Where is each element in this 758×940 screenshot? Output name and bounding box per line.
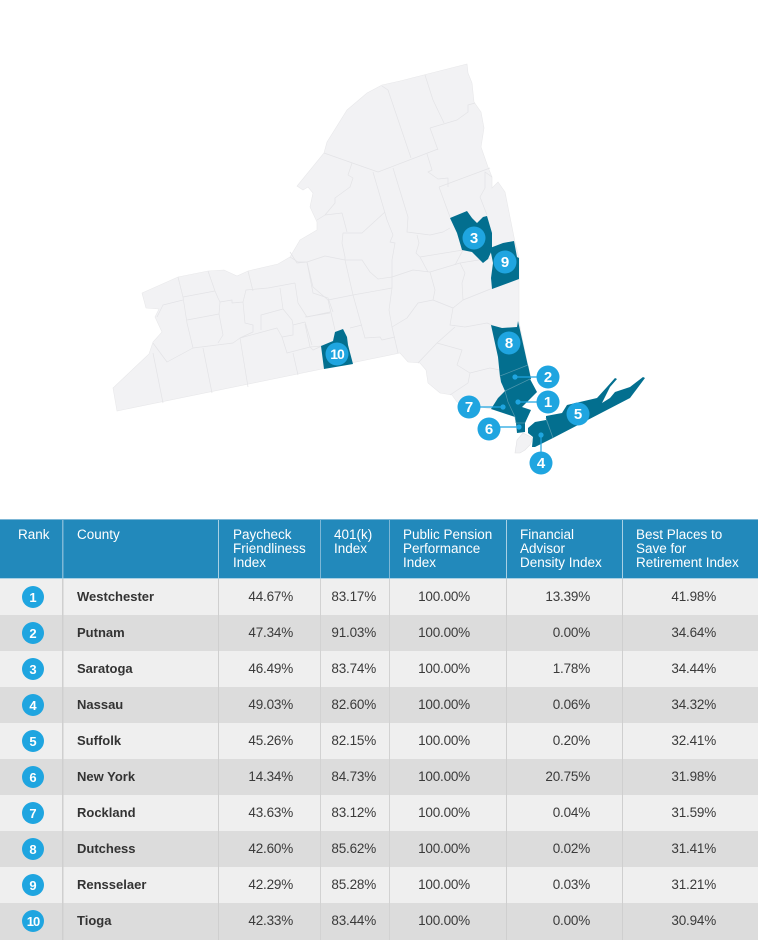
row 5: 0.20% — [553, 733, 590, 748]
row 8: 42.60% — [248, 841, 293, 856]
row 5: 5 — [29, 734, 37, 749]
county: New York — [516, 423, 525, 433]
row 8: Dutchess — [77, 841, 136, 856]
county: Rockland — [491, 391, 515, 417]
map marker 5 — [566, 402, 590, 426]
state outline — [113, 64, 531, 411]
row 6 — [0, 759, 758, 795]
row 10: 42.33% — [248, 913, 293, 928]
county: Nassau — [528, 420, 553, 447]
row 3: Saratoga — [77, 661, 133, 676]
county: Rensselaer — [490, 241, 519, 289]
table header: County — [77, 527, 120, 542]
row 10: Tioga — [77, 913, 112, 928]
row 2: 34.64% — [671, 625, 716, 640]
map marker 2: 2 — [544, 369, 552, 386]
row 4: 34.32% — [671, 697, 716, 712]
row 1 — [0, 579, 758, 615]
row 1: 100.00% — [418, 589, 470, 604]
row 3: 46.49% — [248, 661, 293, 676]
row 10: 0.00% — [553, 913, 590, 928]
row 3: 1.78% — [553, 661, 590, 676]
row 4: Nassau — [77, 697, 123, 712]
map of New York counties — [113, 64, 645, 474]
map marker 3 — [462, 226, 486, 250]
map marker 1: 1 — [544, 394, 552, 411]
row 2 — [0, 615, 758, 651]
row 9: 85.28% — [331, 877, 376, 892]
row 6: 31.98% — [671, 769, 716, 784]
map marker 10: 10 — [330, 346, 345, 362]
county: Westchester — [505, 379, 537, 423]
row 2: 2 — [29, 626, 37, 641]
row 1: 83.17% — [331, 589, 376, 604]
table header: Retirement Index — [636, 555, 739, 570]
map marker 6 — [478, 418, 500, 440]
row 6: 14.34% — [248, 769, 293, 784]
row 1: 1 — [29, 590, 37, 605]
row 3: 83.74% — [331, 661, 376, 676]
county: Saratoga — [450, 211, 492, 263]
table header: Density Index — [520, 555, 602, 570]
row 7: 43.63% — [248, 805, 293, 820]
row 7: 83.12% — [331, 805, 376, 820]
row 8 — [0, 831, 758, 867]
row 7: 31.59% — [671, 805, 716, 820]
row 1: 41.98% — [671, 589, 716, 604]
row 9: 100.00% — [418, 877, 470, 892]
row 9: 31.21% — [671, 877, 716, 892]
row 5: Suffolk — [77, 733, 122, 748]
row 9: Rensselaer — [77, 877, 146, 892]
row 10: 83.44% — [331, 913, 376, 928]
row 3 — [0, 651, 758, 687]
row 1: 13.39% — [545, 589, 590, 604]
map marker 4: 4 — [537, 455, 546, 472]
row 10 — [0, 903, 758, 940]
row 2: 0.00% — [553, 625, 590, 640]
row 9: 0.03% — [553, 877, 590, 892]
row 6: New York — [77, 769, 136, 784]
row 7 — [0, 795, 758, 831]
row 8: 31.41% — [671, 841, 716, 856]
row 8: 8 — [29, 842, 37, 857]
row 10: 10 — [27, 914, 40, 929]
row 2: 100.00% — [418, 625, 470, 640]
row 4: 100.00% — [418, 697, 470, 712]
map marker 2 — [536, 366, 560, 388]
row 4: 4 — [29, 698, 37, 713]
table header: Friendliness — [233, 541, 306, 556]
leader lines — [469, 377, 548, 463]
table header: Paycheck — [233, 527, 292, 542]
row 2: Putnam — [77, 625, 125, 640]
map marker 7 — [458, 396, 480, 418]
row 5: 100.00% — [418, 733, 470, 748]
row 2: 91.03% — [331, 625, 376, 640]
row 8: 100.00% — [418, 841, 470, 856]
row 2: 47.34% — [248, 625, 293, 640]
row 4: 0.06% — [553, 697, 590, 712]
table header: Advisor — [520, 541, 566, 556]
row 1: Westchester — [77, 589, 154, 604]
row 6: 6 — [29, 770, 37, 785]
row 9: 9 — [29, 878, 37, 893]
row 8: 85.62% — [331, 841, 376, 856]
map marker 3: 3 — [470, 230, 478, 247]
table header: 401(k) — [334, 527, 372, 542]
map marker 6: 6 — [485, 421, 493, 438]
row 7: 0.04% — [553, 805, 590, 820]
row 1: 44.67% — [248, 589, 293, 604]
table header: Index — [334, 541, 367, 556]
row 3: 100.00% — [418, 661, 470, 676]
table header: Rank — [18, 527, 50, 542]
row 10: 100.00% — [418, 913, 470, 928]
map marker 7: 7 — [465, 399, 473, 416]
ranking table — [0, 519, 758, 940]
county: Dutchess — [491, 321, 528, 377]
leader dots — [500, 374, 544, 438]
row 7: Rockland — [77, 805, 136, 820]
map marker 8: 8 — [505, 335, 513, 352]
county borders — [153, 75, 500, 403]
row 5: 82.15% — [331, 733, 376, 748]
map marker 9 — [494, 250, 516, 274]
row 5: 45.26% — [248, 733, 293, 748]
row 6: 84.73% — [331, 769, 376, 784]
Staten Island — [515, 433, 533, 453]
map marker 4 — [530, 452, 552, 474]
table header: Public Pension — [403, 527, 492, 542]
table header: Index — [233, 555, 266, 570]
row 7: 100.00% — [418, 805, 470, 820]
table header: Best Places to — [636, 527, 722, 542]
row 3: 34.44% — [671, 661, 716, 676]
map marker 8 — [498, 332, 520, 354]
row 10: 30.94% — [671, 913, 716, 928]
table header: Save for — [636, 541, 687, 556]
county: Putnam — [500, 365, 531, 391]
row 8: 0.02% — [553, 841, 590, 856]
table header: Index — [403, 555, 436, 570]
table header: Performance — [403, 541, 480, 556]
map marker 9: 9 — [501, 254, 509, 271]
county: Tioga — [321, 329, 353, 369]
column separators — [0, 520, 758, 940]
map marker 5: 5 — [574, 406, 582, 423]
row 4: 82.60% — [331, 697, 376, 712]
map marker 10 — [326, 342, 348, 366]
county: Suffolk — [546, 377, 645, 438]
row 9: 42.29% — [248, 877, 293, 892]
selected county dividers — [500, 365, 553, 438]
row 5 — [0, 723, 758, 759]
map marker 1 — [536, 390, 560, 414]
row 6: 20.75% — [545, 769, 590, 784]
row 9 — [0, 867, 758, 903]
row 4 — [0, 687, 758, 723]
row 7: 7 — [29, 806, 37, 821]
table header — [0, 519, 758, 579]
row 3: 3 — [29, 662, 37, 677]
row 5: 32.41% — [671, 733, 716, 748]
row 6: 100.00% — [418, 769, 470, 784]
row 4: 49.03% — [248, 697, 293, 712]
table header: Financial — [520, 527, 574, 542]
